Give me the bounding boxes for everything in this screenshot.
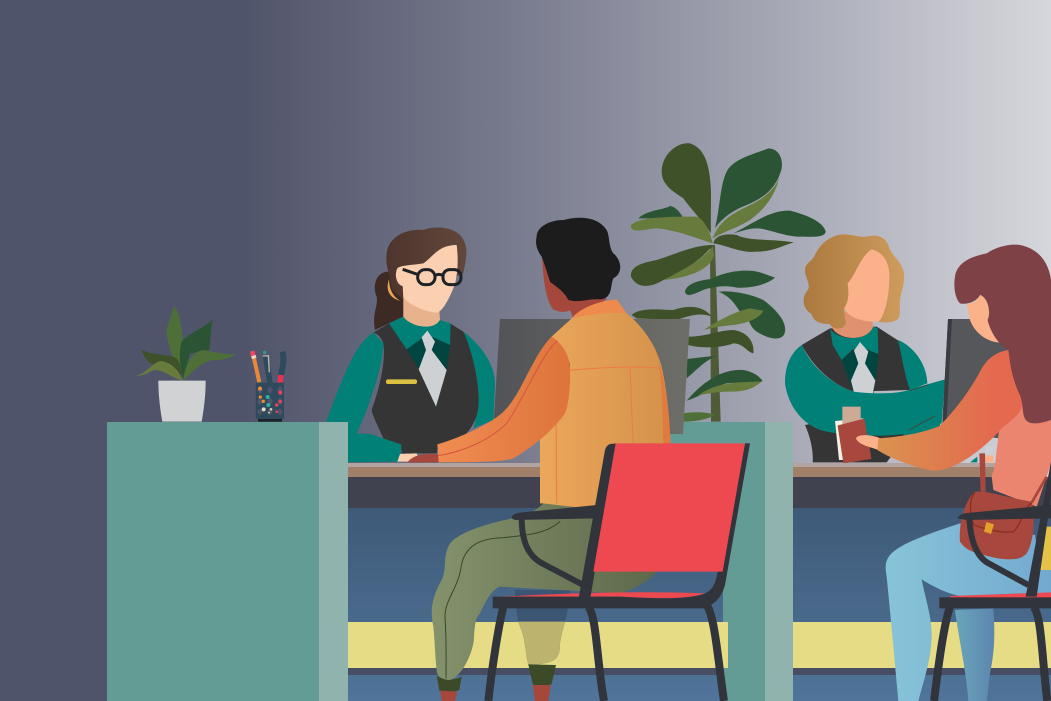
chair one [488,443,750,701]
service desk right section [793,463,1051,701]
chair two [934,462,1051,701]
large potted plant [631,143,826,422]
left counter block [107,422,348,701]
pen holder [252,351,284,422]
small potted plant [136,306,237,422]
seated woman [877,245,1051,507]
teller two (curly hair) [785,234,993,463]
seated man: legs [432,503,657,701]
middle counter block [670,422,793,701]
seated woman: legs and handbag [886,477,1051,701]
computer monitor one [493,319,690,434]
teller one (glasses and ponytail) [320,228,495,462]
service desk left section [348,463,728,701]
seated man: torso, head and arm [407,218,671,510]
computer monitor two [942,319,1010,440]
